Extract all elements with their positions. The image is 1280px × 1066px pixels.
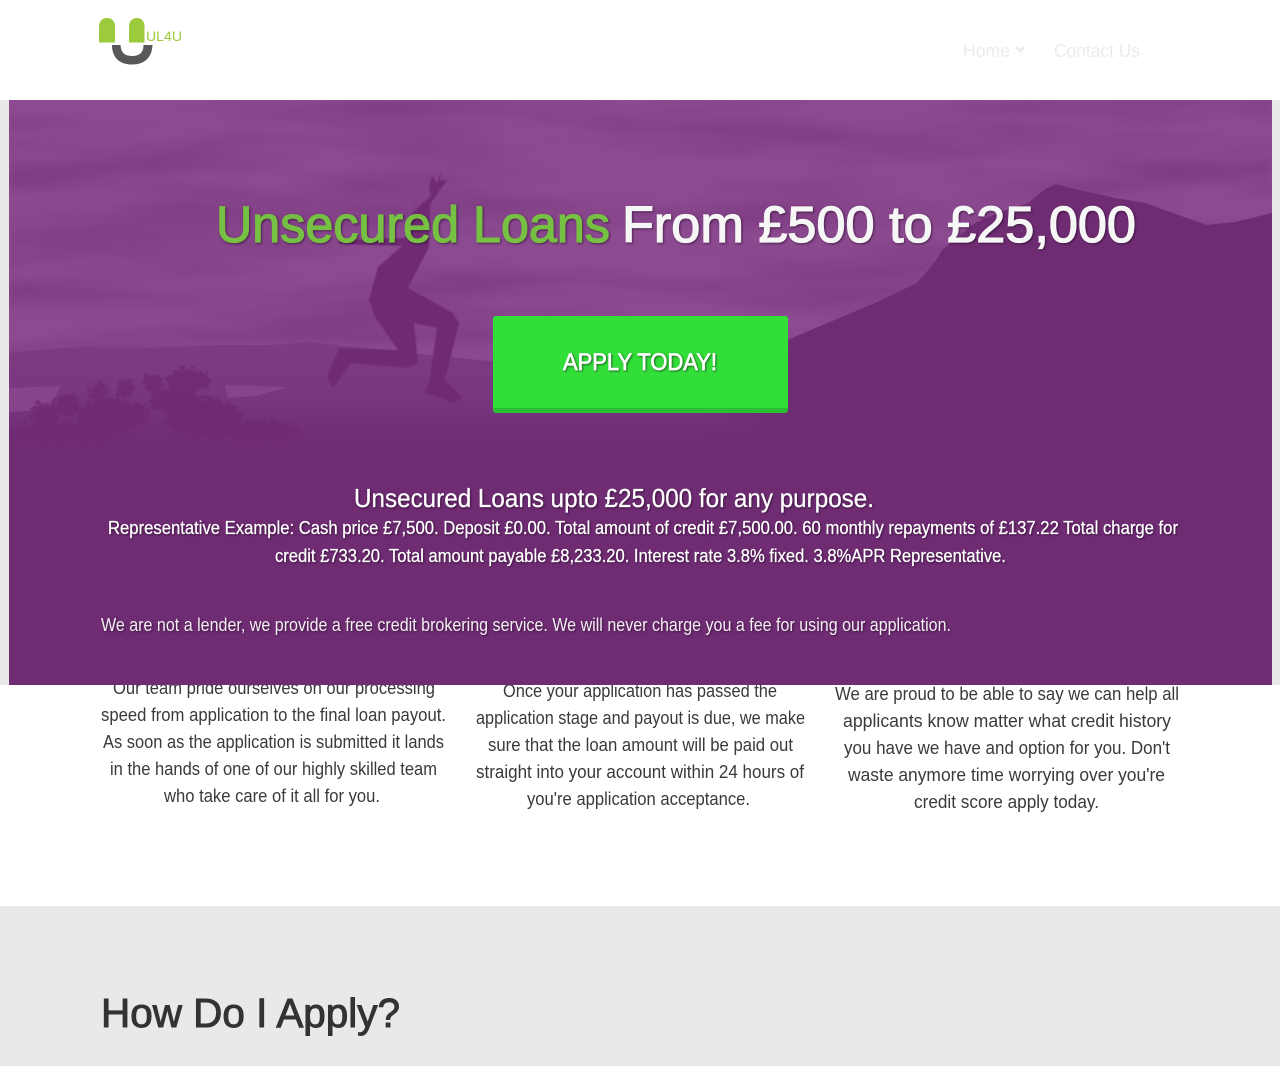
headline	[216, 196, 1136, 253]
nav item: Contact Us: Contact Us	[1054, 41, 1140, 61]
feature column: payout: you're application acceptance.	[527, 789, 750, 809]
hero photo background	[0, 100, 1272, 685]
representative example: Representative Example: Cash price £7,500. Deposit £0.00. Total amount of credit £7,500.00. 60 monthly repayments of £137.22 Total charge for	[108, 518, 1178, 538]
water strip	[9, 385, 288, 412]
broker disclaimer: We are not a lender, we provide a free credit brokering service. We will never charge you a fee for using our application.	[101, 615, 951, 635]
feature column: processing speed	[101, 678, 446, 806]
jumping person silhouette	[327, 172, 463, 403]
apply button: APPLY TODAY!	[563, 349, 717, 376]
feature column: payout: Once your application has passed the	[503, 681, 777, 701]
section heading: How Do I Apply?	[101, 990, 400, 1036]
feature column: credit history	[835, 684, 1179, 812]
feature column: payout: application stage and payout is due, we make	[476, 708, 805, 728]
headline: Unsecured Loans	[216, 196, 610, 253]
apply button	[493, 316, 788, 413]
hero panel	[0, 100, 1272, 685]
feature column: credit history: We are proud to be able to say we can help all	[835, 684, 1179, 704]
mountain silhouette	[788, 184, 1272, 414]
subheading: Unsecured Loans upto £25,000 for any purpose.	[354, 483, 874, 513]
page side strips	[0, 100, 1280, 685]
representative example	[108, 518, 1178, 566]
feature column: processing speed: As soon as the application is submitted it lands	[103, 732, 444, 752]
feature column: credit history: credit score apply today.	[914, 792, 1099, 812]
logo	[99, 18, 182, 64]
trees	[24, 366, 294, 424]
feature column: processing speed: in the hands of one of our highly skilled team	[110, 759, 437, 779]
nav item: Home: Home	[963, 41, 1010, 61]
feature column: processing speed: who take care of it all for you.	[163, 786, 380, 806]
navigation	[963, 41, 1140, 61]
feature column: processing speed: Our team pride ourselves on our processing	[113, 678, 435, 698]
how do I apply section	[0, 906, 1280, 1066]
feature column: credit history: applicants know matter what credit history	[843, 711, 1171, 731]
feature column: credit history: waste anymore time worrying over you're	[847, 765, 1165, 785]
distant hills	[9, 342, 707, 414]
logo wordmark: UL4U	[146, 28, 182, 44]
representative example: credit £733.20. Total amount payable £8,233.20. Interest rate 3.8% fixed. 3.8%APR Representative.	[275, 546, 1006, 566]
feature column: payout	[476, 681, 805, 809]
feature column: payout: sure that the loan amount will be paid out	[488, 735, 793, 755]
icon: dropdown chevron	[1016, 47, 1024, 51]
icon: UL4U smile mark	[99, 18, 152, 64]
feature column: processing speed: speed from application to the final loan payout.	[101, 705, 446, 725]
feature column: payout: straight into your account within 24 hours of	[476, 762, 805, 782]
headline: From £500 to £25,000	[622, 196, 1136, 253]
feature column: credit history: you have we have and option for you. Don't	[844, 738, 1170, 758]
